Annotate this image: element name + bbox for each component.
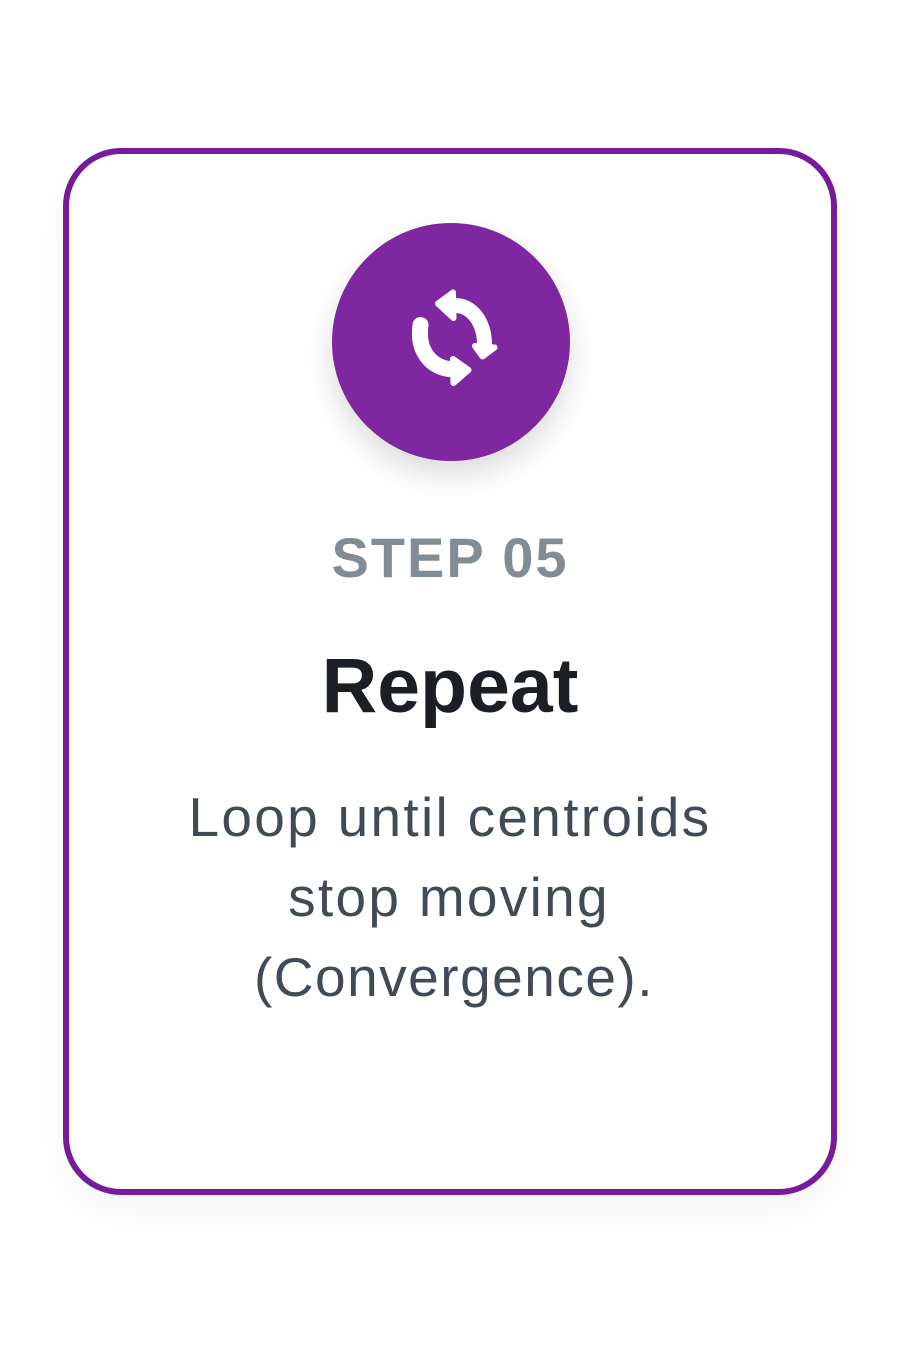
heading: Repeat (322, 642, 578, 728)
icon: purple circle badge (332, 223, 570, 461)
description text: stop moving (288, 866, 610, 928)
description text (188, 786, 711, 1008)
description text: Loop until centroids (188, 786, 711, 848)
description text: (Convergence). (254, 946, 654, 1008)
panel: step card (63, 148, 837, 1194)
step label: STEP 05 (331, 526, 569, 589)
